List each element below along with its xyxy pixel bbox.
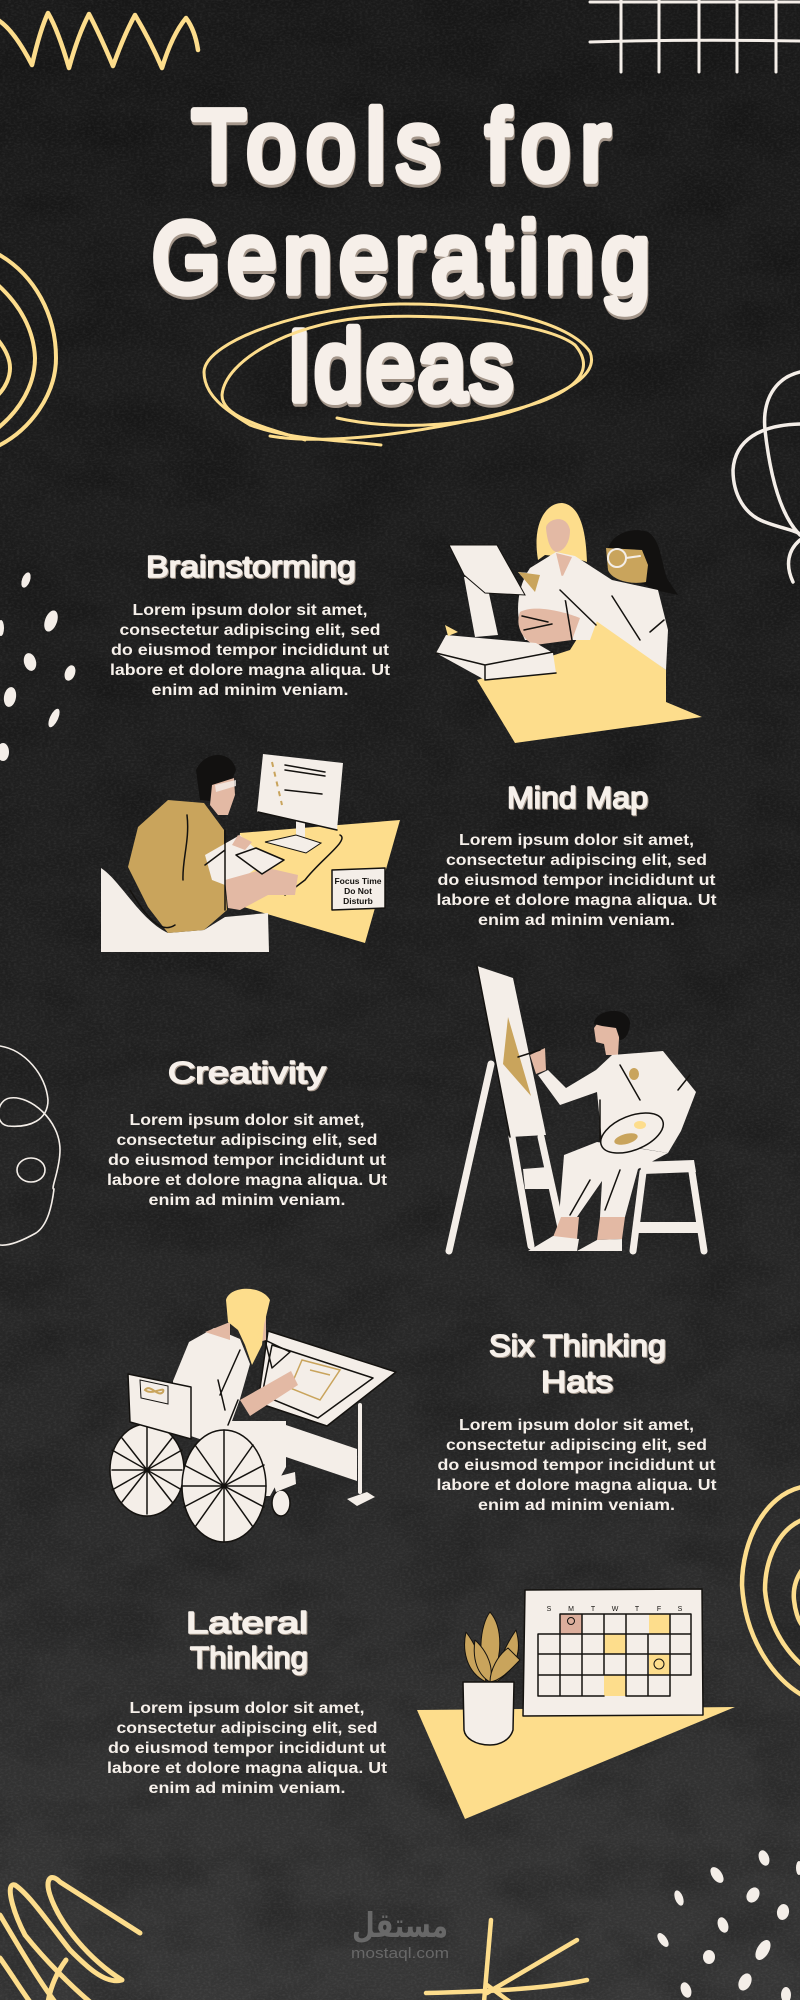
yellow table <box>417 1707 735 1819</box>
text block: labore et dolore magna aliqua. Ut <box>436 1477 717 1494</box>
heading: Lateral Thinking: Thinking <box>190 1640 308 1675</box>
text block: enim ad minim veniam. <box>478 912 675 929</box>
text block: enim ad minim veniam. <box>148 1192 346 1209</box>
decoration: white flecks left <box>0 571 77 761</box>
yellow desk <box>230 820 400 943</box>
text block: labore et dolore magna aliqua. Ut <box>107 1172 388 1189</box>
illustration: person at computer, Focus Time sign <box>101 754 400 952</box>
decoration: white flecks bottom right <box>655 1849 800 2000</box>
heading: Six Thinking Hats <box>489 1328 666 1399</box>
decoration: yellow star strokes bottom <box>426 1920 587 2000</box>
watermark: mostaql logo <box>351 1906 449 1962</box>
decoration: thin white scribble left <box>0 1046 60 1245</box>
calendar: T <box>635 1606 640 1613</box>
sign: Focus Time Do Not Disturb: Focus Time <box>334 876 382 886</box>
illustration: painter at easel <box>449 966 704 1251</box>
blonde woman <box>518 503 612 645</box>
title line 3: Ideas <box>287 310 513 421</box>
illustration: two women at a monitor <box>436 503 702 743</box>
painter <box>518 1011 696 1251</box>
heading: Lateral Thinking: Lateral <box>186 1605 308 1640</box>
text block: do eiusmod tempor incididunt ut <box>108 1152 387 1169</box>
text block <box>107 1700 388 1797</box>
text block: labore et dolore magna aliqua. Ut <box>110 662 391 679</box>
watermark: mostaql logo: mostaql.com <box>351 1945 449 1962</box>
panel: Mind Map <box>436 780 717 929</box>
calendar: T <box>591 1606 596 1613</box>
decoration: yellow zigzag top left <box>0 13 198 68</box>
text block: consectetur adipiscing elit, sed <box>116 1132 378 1149</box>
text block <box>436 832 717 929</box>
text block <box>436 1417 717 1514</box>
calendar: S <box>547 1606 552 1613</box>
keyboard <box>236 848 284 874</box>
sign: Focus Time Do Not Disturb <box>332 868 385 910</box>
calendar: F <box>657 1606 661 1613</box>
calendar: M <box>568 1606 574 1613</box>
text block: consectetur adipiscing elit, sed <box>446 852 707 869</box>
text block: Lorem ipsum dolor sit amet, <box>130 1112 364 1129</box>
front wheel <box>182 1430 296 1542</box>
panel: Lateral Thinking <box>107 1605 388 1797</box>
heading: Six Thinking Hats: Hats <box>541 1364 613 1399</box>
heading: Six Thinking Hats: Six Thinking <box>489 1328 666 1363</box>
illustration: calendar and potted plant <box>417 1589 735 1819</box>
watermark: mostaql logo: مستقل <box>352 1906 448 1946</box>
text block <box>110 602 391 699</box>
text block: consectetur adipiscing elit, sed <box>120 622 380 639</box>
text block: do eiusmod tempor incididunt ut <box>438 872 716 889</box>
text block: enim ad minim veniam. <box>478 1497 675 1514</box>
title line 1: Tools for <box>192 90 610 201</box>
decoration: white scribble right <box>733 372 800 582</box>
monitor on stand <box>436 545 556 680</box>
heading: Creativity: Creativity <box>168 1055 327 1090</box>
panel: Creativity <box>107 1055 388 1209</box>
decoration: yellow spiral left <box>0 254 56 446</box>
yellow scribbled oval around Ideas <box>204 304 592 445</box>
text block: enim ad minim veniam. <box>152 682 348 699</box>
sign: Focus Time Do Not Disturb: Do Not <box>344 886 372 896</box>
text block <box>107 1112 388 1209</box>
text block: do eiusmod tempor incididunt ut <box>438 1457 716 1474</box>
heading: Brainstorming: Brainstorming <box>146 549 356 584</box>
back wheel <box>110 1424 184 1516</box>
text block: enim ad minim veniam. <box>148 1780 346 1797</box>
heading: Lateral Thinking <box>186 1605 308 1675</box>
title line 2: Generating <box>152 202 650 313</box>
heading: Mind Map: Mind Map <box>507 780 648 815</box>
yellow desk <box>477 615 702 743</box>
panel: Brainstorming <box>110 549 391 699</box>
sign: Focus Time Do Not Disturb: Disturb <box>343 896 373 906</box>
dark haired woman <box>518 530 678 670</box>
monitor <box>257 754 343 895</box>
calendar: W <box>612 1606 619 1613</box>
calendar <box>523 1589 703 1716</box>
easel <box>449 966 561 1251</box>
calendar: S <box>678 1606 683 1613</box>
drafting table <box>258 1331 396 1506</box>
illustration: woman in wheelchair at drafting table <box>110 1289 396 1542</box>
text block: consectetur adipiscing elit, sed <box>116 1720 378 1737</box>
text block: labore et dolore magna aliqua. Ut <box>436 892 717 909</box>
decoration: yellow spiral right <box>742 1487 800 1695</box>
seated woman <box>173 1289 298 1496</box>
person in tan shirt <box>128 755 298 933</box>
decoration: yellow scribble bottom left <box>0 1878 140 2000</box>
title <box>152 90 650 421</box>
text block: labore et dolore magna aliqua. Ut <box>107 1760 388 1777</box>
text block: Lorem ipsum dolor sit amet, <box>459 1417 694 1434</box>
plant leaves <box>465 1612 520 1682</box>
chair and trousers <box>101 868 269 952</box>
pot <box>463 1682 514 1745</box>
text block: Lorem ipsum dolor sit amet, <box>132 602 368 619</box>
decoration: white grid top right <box>590 0 800 72</box>
text block: do eiusmod tempor incididunt ut <box>111 642 390 659</box>
text block: consectetur adipiscing elit, sed <box>446 1437 707 1454</box>
text block: Lorem ipsum dolor sit amet, <box>130 1700 364 1717</box>
panel: Six Thinking Hats <box>436 1328 717 1514</box>
wheelchair back with pocket <box>128 1374 191 1439</box>
text block: do eiusmod tempor incididunt ut <box>108 1740 387 1757</box>
text block: Lorem ipsum dolor sit amet, <box>459 832 694 849</box>
stool <box>633 1160 704 1251</box>
